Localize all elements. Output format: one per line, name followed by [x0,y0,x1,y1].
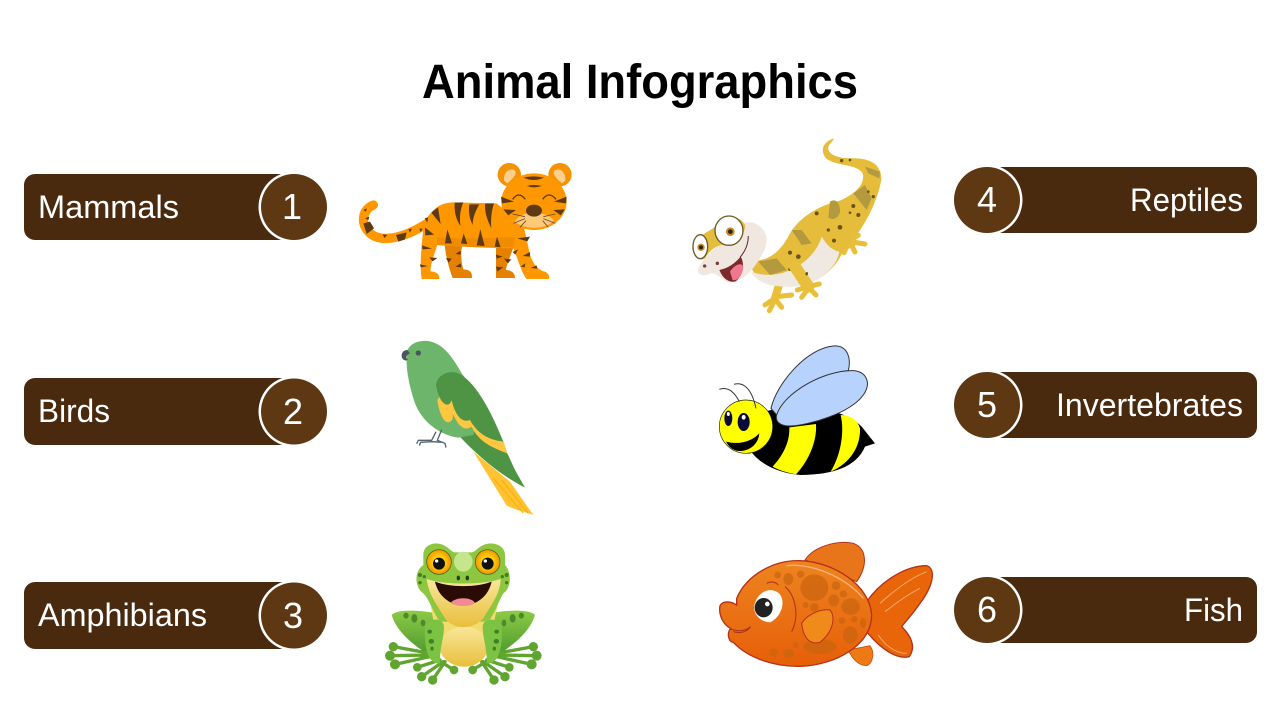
label: Invertebrates 5: 5 [977,384,997,425]
label: Amphibians 3 [24,580,330,651]
label: Mammals 1: 1 [282,186,302,227]
label: Fish 6 [952,574,1257,646]
icon: bee [719,346,875,475]
label: Birds 2: Birds [38,393,110,429]
label: Reptiles 4: Reptiles [1130,182,1243,218]
label: Invertebrates 5: Invertebrates [1056,387,1243,423]
icon: frog [385,543,542,685]
label: Invertebrates 5 [952,370,1257,440]
label: Reptiles 4: 4 [977,179,997,220]
icon: goldfish [720,542,932,666]
label: Mammals 1 [24,172,330,242]
label: Birds 2: 2 [283,391,303,432]
label: Mammals 1: Mammals [38,189,179,225]
label: Reptiles 4 [952,164,1257,236]
icon: tiger [363,163,572,279]
icon: gecko [693,138,881,311]
label: Fish 6: Fish [1184,592,1243,628]
title: Animal Infographics [422,56,858,109]
label: Amphibians 3: Amphibians [38,597,207,633]
icon: parrot [402,341,533,515]
label: Amphibians 3: 3 [283,595,303,636]
label: Fish 6: 6 [977,589,997,630]
label: Birds 2 [24,376,330,447]
